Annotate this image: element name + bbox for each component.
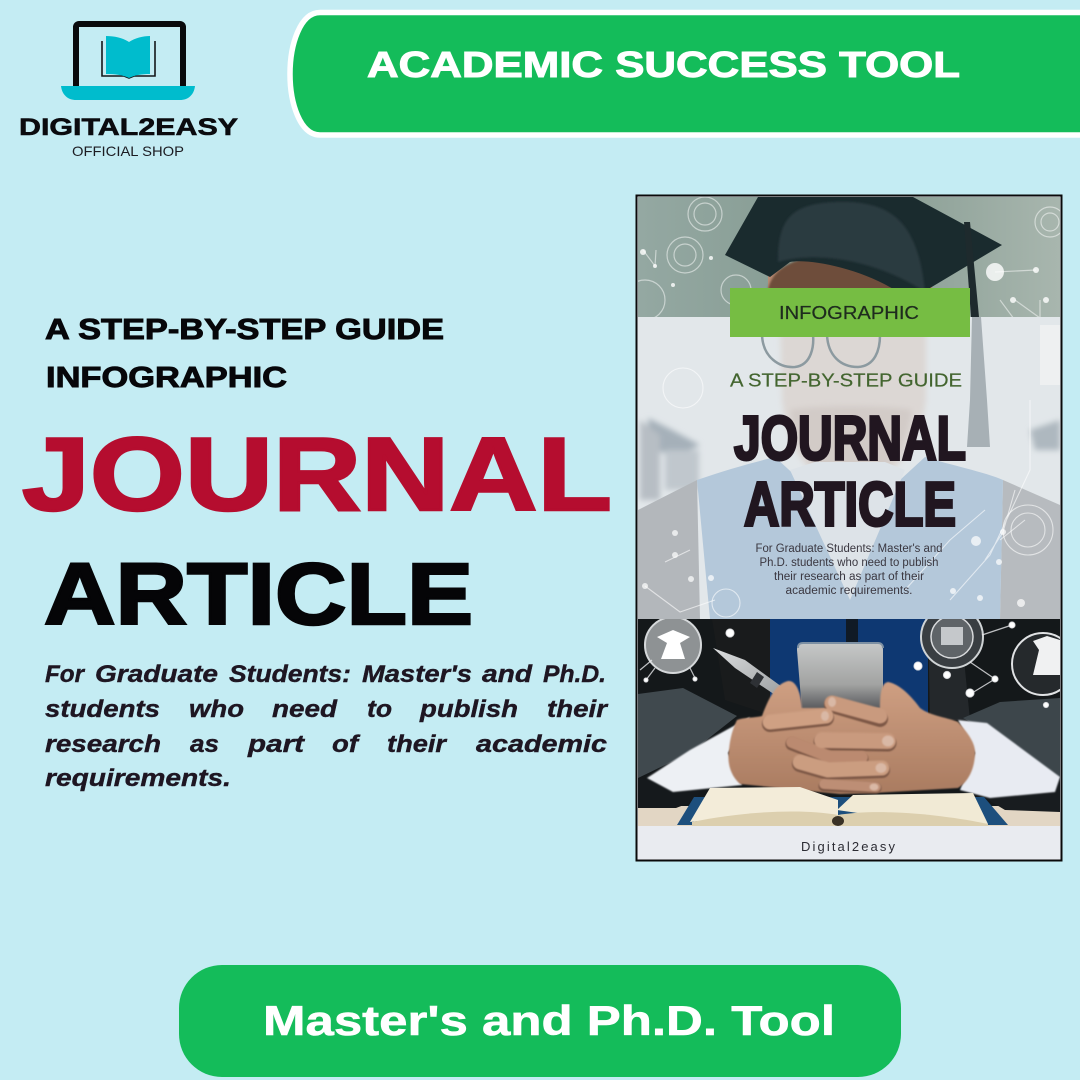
bottom button: [179, 965, 901, 1077]
description text: [45, 661, 609, 792]
logo: Digital2easy official shop: [19, 24, 238, 159]
cover subtitle: A STEP-BY-STEP GUIDE: [730, 370, 962, 390]
heading: step-by-step guide: INFOGRAPHIC: [46, 362, 287, 394]
description text: publish: [419, 696, 518, 723]
table: [638, 806, 1060, 826]
network nodes upper: [638, 197, 1060, 317]
pen: [713, 648, 780, 694]
description text: students: [45, 696, 160, 723]
description text: their: [387, 731, 448, 758]
network lines: [640, 622, 1048, 708]
description text: academic: [476, 731, 607, 758]
icon: laptop with open book: [61, 24, 195, 100]
faded background graduates: [640, 418, 1060, 500]
description text: requirements.: [45, 765, 231, 792]
description text: Students:: [229, 661, 351, 688]
description text: to: [367, 696, 392, 723]
graduation cap: [725, 197, 1002, 297]
cover footer brand: Digital2easy: [801, 839, 896, 854]
top banner: [290, 12, 1080, 135]
right sleeve: [963, 698, 1060, 778]
description text: need: [272, 696, 339, 723]
logo name: DIGITAL2EASY: [19, 114, 238, 141]
logo tagline: OFFICIAL SHOP: [72, 143, 184, 159]
heading: step-by-step guide: A STEP-BY-STEP GUIDE: [45, 314, 444, 346]
description text: part: [247, 731, 305, 758]
description text: Ph.D.: [543, 661, 606, 688]
faded glasses: [762, 335, 880, 367]
faded tassel: [967, 317, 990, 447]
hands: [728, 681, 975, 794]
description text: Graduate: [95, 661, 218, 688]
footer band: [638, 826, 1060, 859]
description text: their: [547, 696, 609, 723]
heading: step-by-step guide: [45, 314, 444, 394]
left sleeve: [638, 688, 737, 778]
cover title: ARTICLE: [744, 470, 956, 540]
cover title: JOURNAL: [734, 404, 966, 474]
cover description: their research as part of their: [774, 571, 924, 583]
title: JOURNAL: JOURNAL: [22, 417, 612, 533]
cover photo: graduate with cap: [638, 197, 1060, 322]
description text: research: [45, 731, 161, 758]
green label: INFOGRAPHIC: [779, 303, 919, 323]
description text: as: [190, 731, 219, 758]
faded face: [780, 337, 927, 466]
description text: For: [45, 661, 86, 688]
hair: [767, 261, 892, 288]
tassel cord: [964, 222, 979, 317]
button label: Master's and Ph.D. Tool: [263, 997, 835, 1044]
banner title: ACADEMIC SUCCESS TOOL: [367, 44, 960, 85]
right cuff: [958, 720, 1060, 798]
under-sleeve shadows: [638, 806, 682, 808]
circular icon: left: [645, 617, 701, 673]
description text: and: [482, 661, 534, 688]
description text: who: [189, 696, 244, 723]
circular icon: right: [1011, 632, 1060, 696]
title: ARTICLE: ARTICLE: [44, 546, 473, 643]
cover description: For Graduate Students: Master's and: [756, 543, 942, 555]
fingers: [770, 703, 888, 787]
cover title: [734, 404, 966, 540]
phone: [797, 643, 883, 712]
description text: of: [332, 731, 360, 758]
left cuff: [647, 717, 750, 792]
network nodes lower: [645, 368, 1053, 617]
green label: [730, 288, 970, 337]
photo: hands, phone, pen and book: [638, 606, 1074, 826]
finger shadows: [770, 705, 888, 788]
cover description: [756, 543, 942, 597]
blue backdrop: [770, 619, 928, 714]
faded gown: [638, 480, 700, 619]
panel: book cover: [625, 196, 1074, 860]
notebook: [677, 797, 1008, 825]
cover description: academic requirements.: [786, 585, 912, 597]
fingernails: [821, 697, 894, 790]
cover description: Ph.D. students who need to publish: [760, 557, 938, 569]
translucent panel scene: [638, 317, 1060, 619]
circular icon: middle: [920, 619, 984, 669]
description text: Master's: [362, 661, 472, 688]
